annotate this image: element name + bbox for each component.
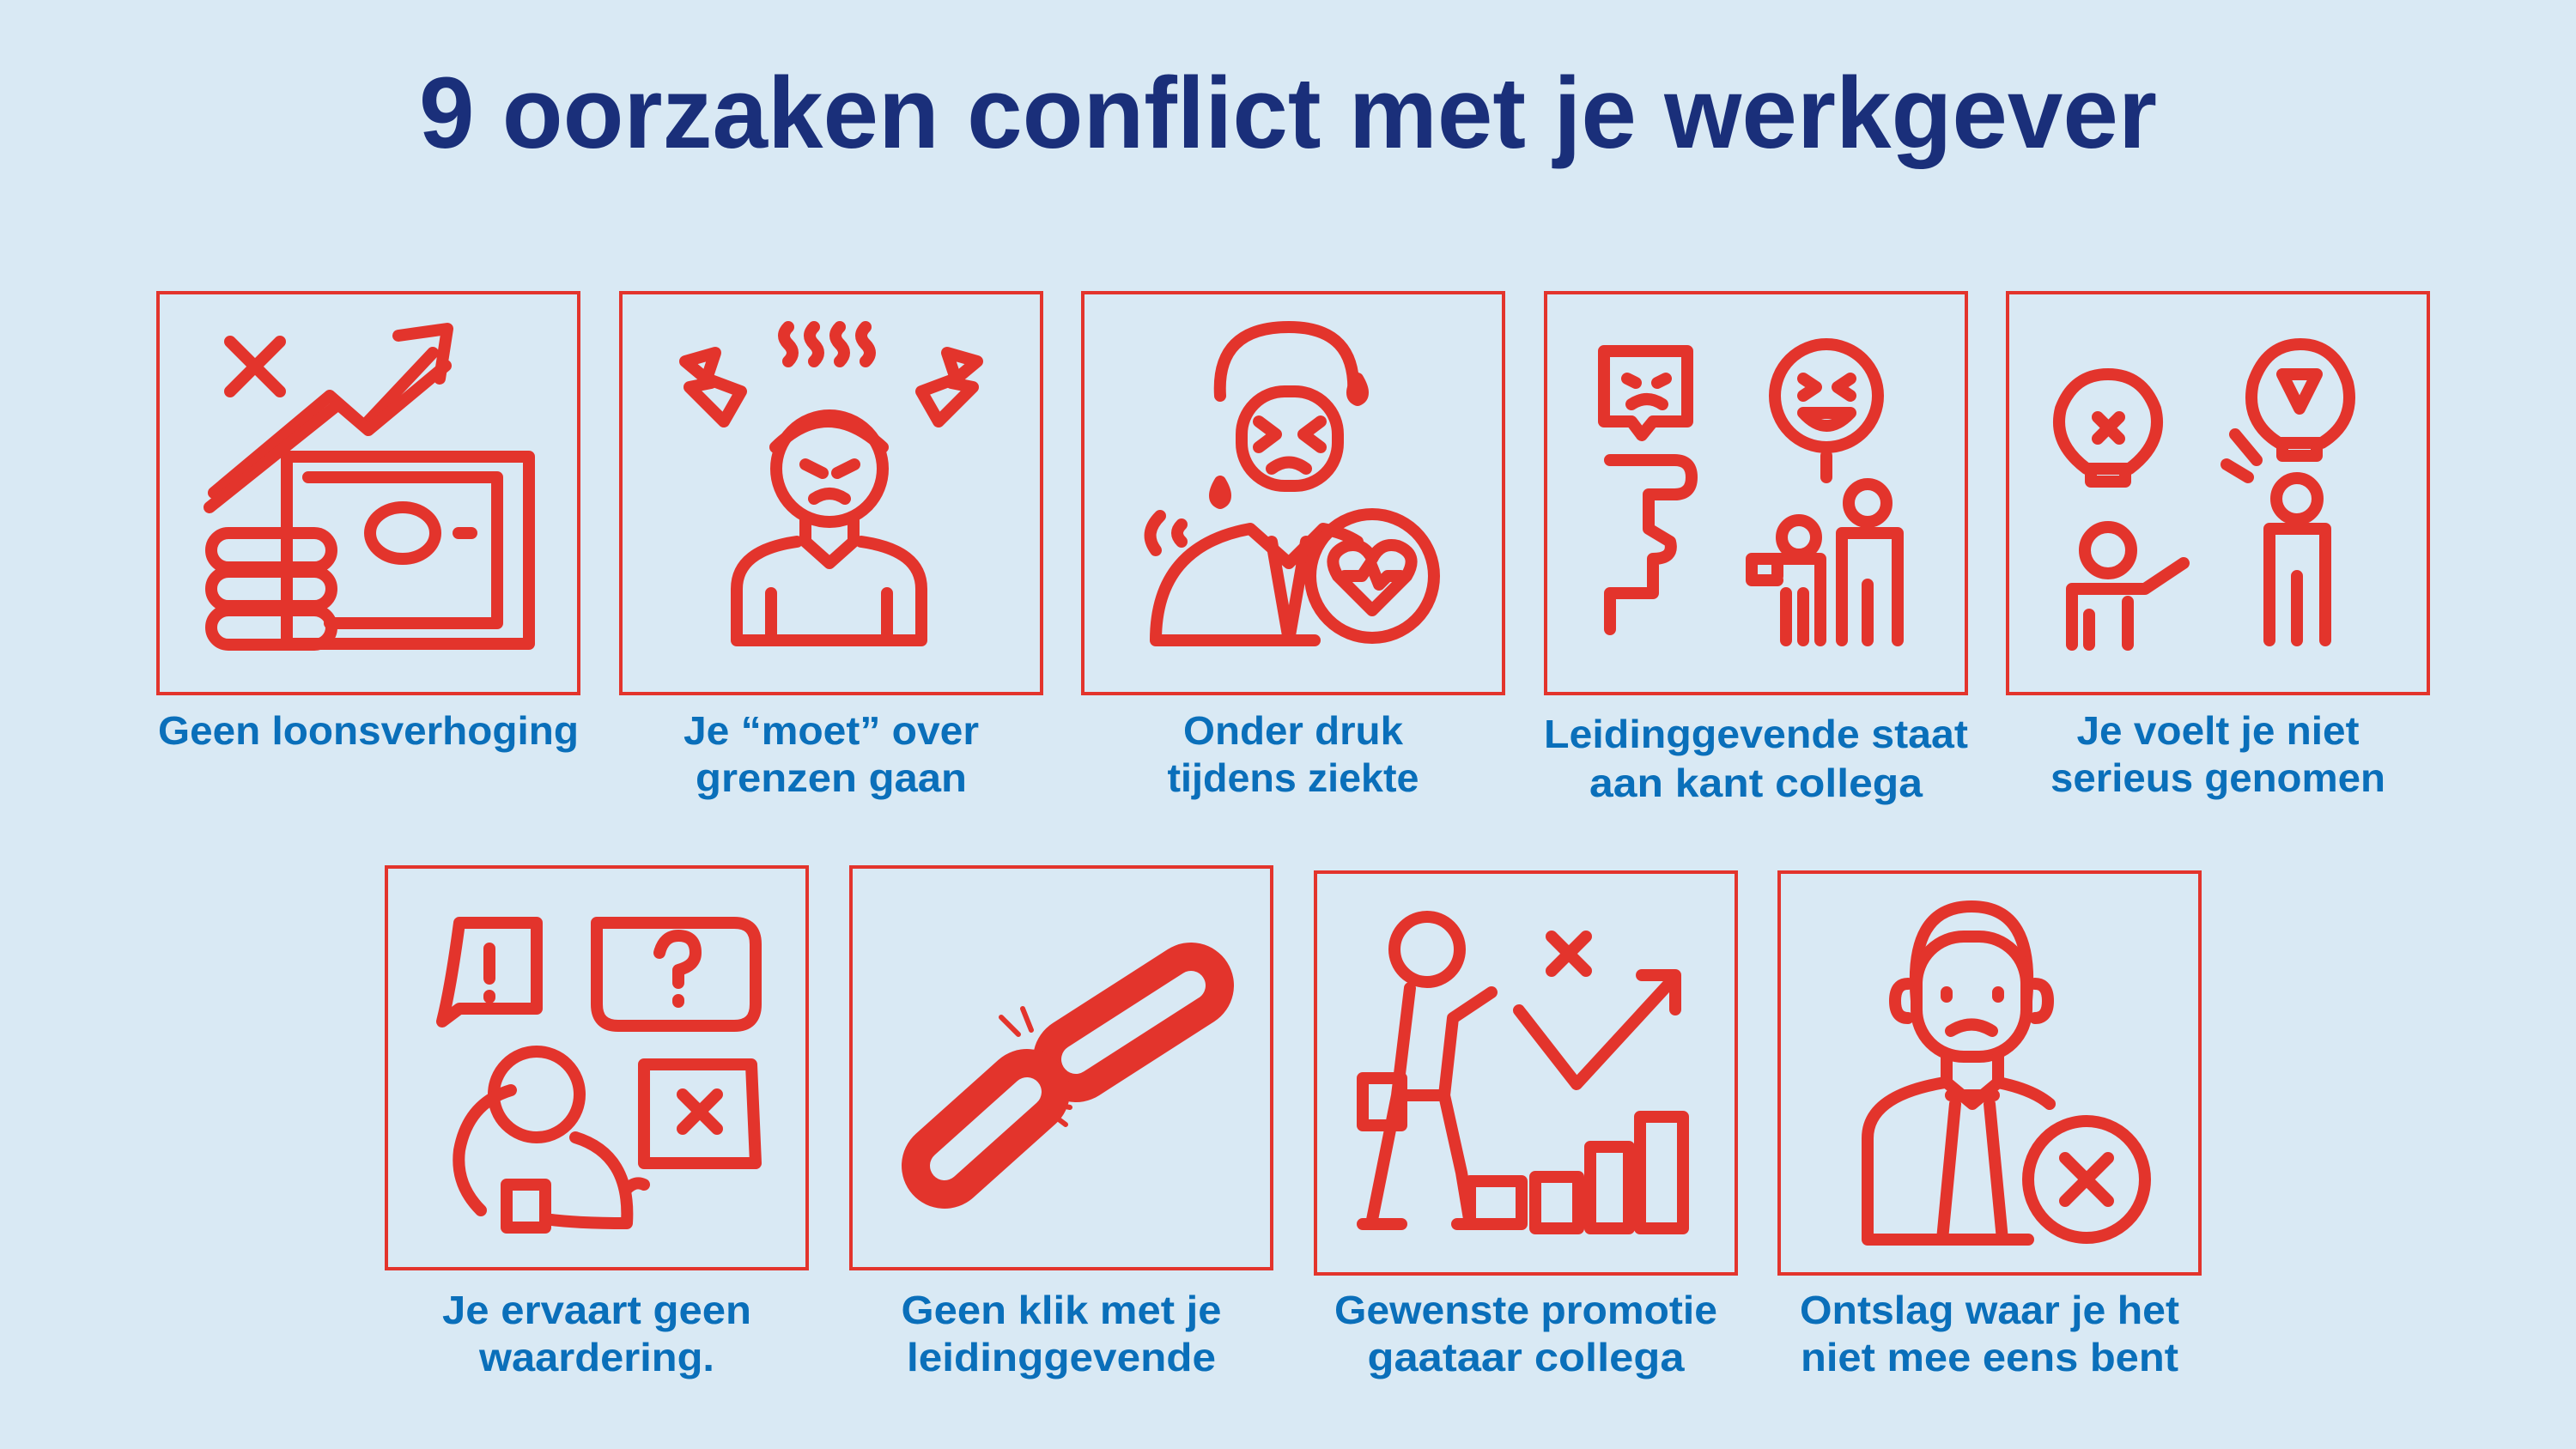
panel: niet serieus — [2008, 293, 2428, 800]
panel: ontslag: niet mee eens bent — [1801, 1335, 2178, 1379]
panel: geen waardering — [386, 867, 807, 1379]
panel: geen waardering: waardering. — [478, 1335, 714, 1379]
icon: sad man with x — [1868, 906, 2145, 1240]
panel: leidinggevende: aan kant collega — [1589, 761, 1923, 805]
panel: promotie — [1315, 872, 1736, 1379]
icon: money with arrow — [210, 329, 529, 645]
panel: geen klik: leidinggevende — [907, 1335, 1216, 1379]
label: Geen klik met je — [902, 1288, 1221, 1332]
panel: grenzen: grenzen gaan — [696, 755, 967, 800]
panel: ziekte — [1083, 293, 1504, 800]
label: Je “moet” over — [683, 708, 979, 753]
panel: niet serieus: serieus genomen — [2050, 755, 2385, 800]
icon: broken chain — [945, 985, 1191, 1166]
panel: leidinggevende — [1544, 293, 1968, 805]
icon: confused person with bubbles — [442, 923, 756, 1228]
title: 9 oorzaken conflict met je werkgever — [419, 57, 2157, 170]
label: Geen loonsverhoging — [158, 708, 579, 753]
panel: geen loonsverhoging — [158, 293, 579, 753]
icon: sick stressed man with heart — [1151, 327, 1434, 640]
label: Je voelt je niet — [2076, 708, 2360, 753]
icon: two people with bulbs — [2059, 344, 2349, 645]
label: Ontslag waar je het — [1800, 1288, 2179, 1332]
icon: face profile and figures — [1604, 344, 1898, 640]
icon: climbing person and bars — [1363, 917, 1683, 1228]
panel: ontslag — [1779, 872, 2200, 1379]
label: Onder druk — [1183, 708, 1403, 753]
panel: promotie: gaataar collega — [1367, 1335, 1685, 1379]
panel: geen klik — [851, 867, 1272, 1379]
label: Leidinggevende staat — [1544, 712, 1968, 756]
label: Je ervaart geen — [442, 1288, 751, 1332]
icon: angry man — [685, 327, 977, 640]
panel: ziekte: tijdens ziekte — [1168, 755, 1419, 800]
panel: grenzen — [621, 293, 1042, 800]
label: Gewenste promotie — [1334, 1288, 1717, 1332]
